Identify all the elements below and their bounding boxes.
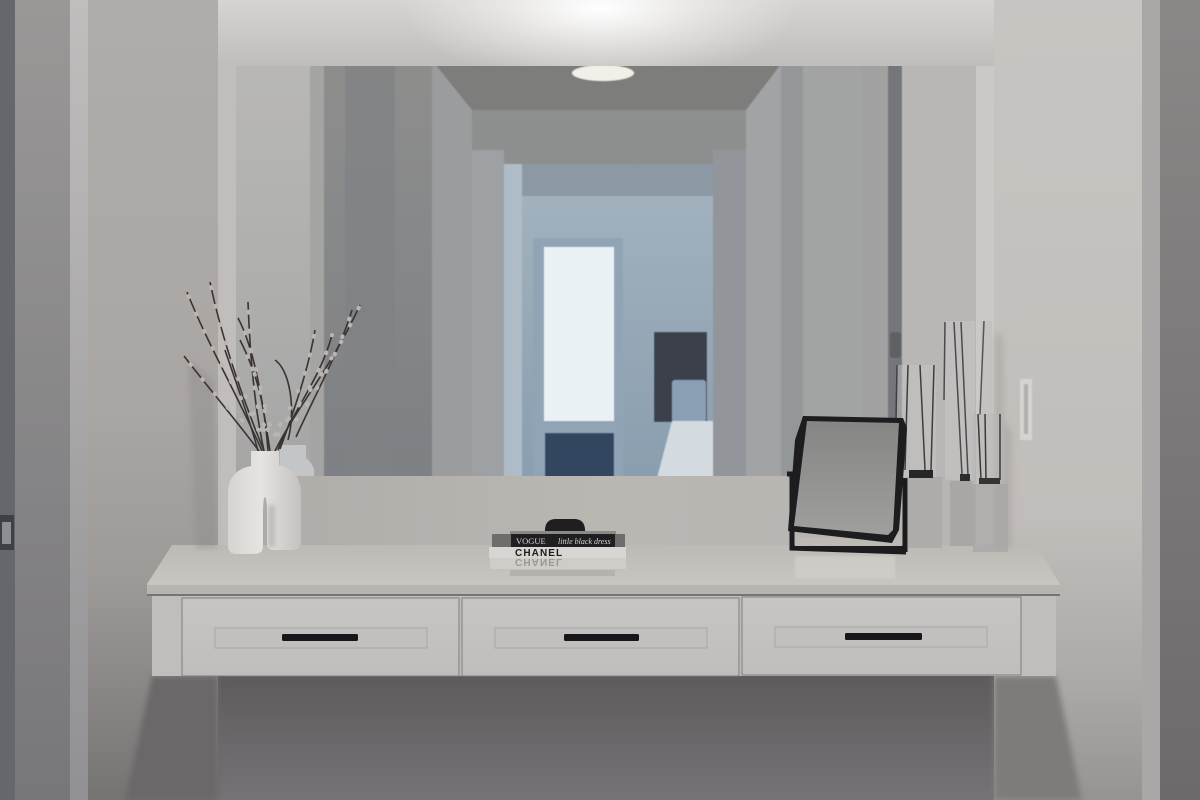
right side wall xyxy=(994,0,1142,800)
left door frame xyxy=(0,0,88,800)
stack of books xyxy=(489,519,626,576)
vase tall back xyxy=(981,321,992,415)
cabinet body xyxy=(152,595,1056,676)
glass candle vases xyxy=(896,321,1008,552)
light switch xyxy=(1020,379,1032,440)
vase short right xyxy=(972,414,1004,484)
mirror reflection: right door xyxy=(803,66,862,417)
mirror xyxy=(230,60,982,482)
stand xyxy=(787,474,906,552)
mirror reflection: hallway walls xyxy=(432,60,472,482)
dish xyxy=(545,519,585,533)
under-counter recess xyxy=(125,670,1082,800)
tabletop mirror xyxy=(787,416,907,552)
arch shading xyxy=(268,505,275,547)
willow catkins xyxy=(184,282,360,435)
small vase in mirror xyxy=(279,445,314,476)
drawer 3 xyxy=(742,597,1021,675)
white arch vase xyxy=(228,451,301,554)
drawer 2 xyxy=(462,598,739,676)
ceiling light xyxy=(572,65,634,81)
vase tall xyxy=(945,321,975,480)
vase short left xyxy=(896,365,936,477)
drawer 1 xyxy=(182,598,459,676)
countertop xyxy=(147,545,1060,596)
left side wall xyxy=(88,0,218,800)
stack of books: little black dress xyxy=(558,537,611,546)
willow branches xyxy=(184,282,360,451)
right door frame xyxy=(1142,0,1200,800)
mirror reflection: pale left wall xyxy=(236,66,310,472)
stack of books: CHANEL xyxy=(515,556,563,567)
stack of books: VOGUE xyxy=(516,536,546,546)
vase shadow on wall xyxy=(188,335,1012,548)
back wall xyxy=(218,0,994,546)
frame and face xyxy=(788,416,907,543)
stack of books: CHANEL xyxy=(515,548,563,559)
mirror reflection: bedroom xyxy=(504,164,713,482)
wall below mirror xyxy=(236,476,976,545)
mirror reflection: left door xyxy=(324,210,432,476)
reflection xyxy=(490,558,626,569)
